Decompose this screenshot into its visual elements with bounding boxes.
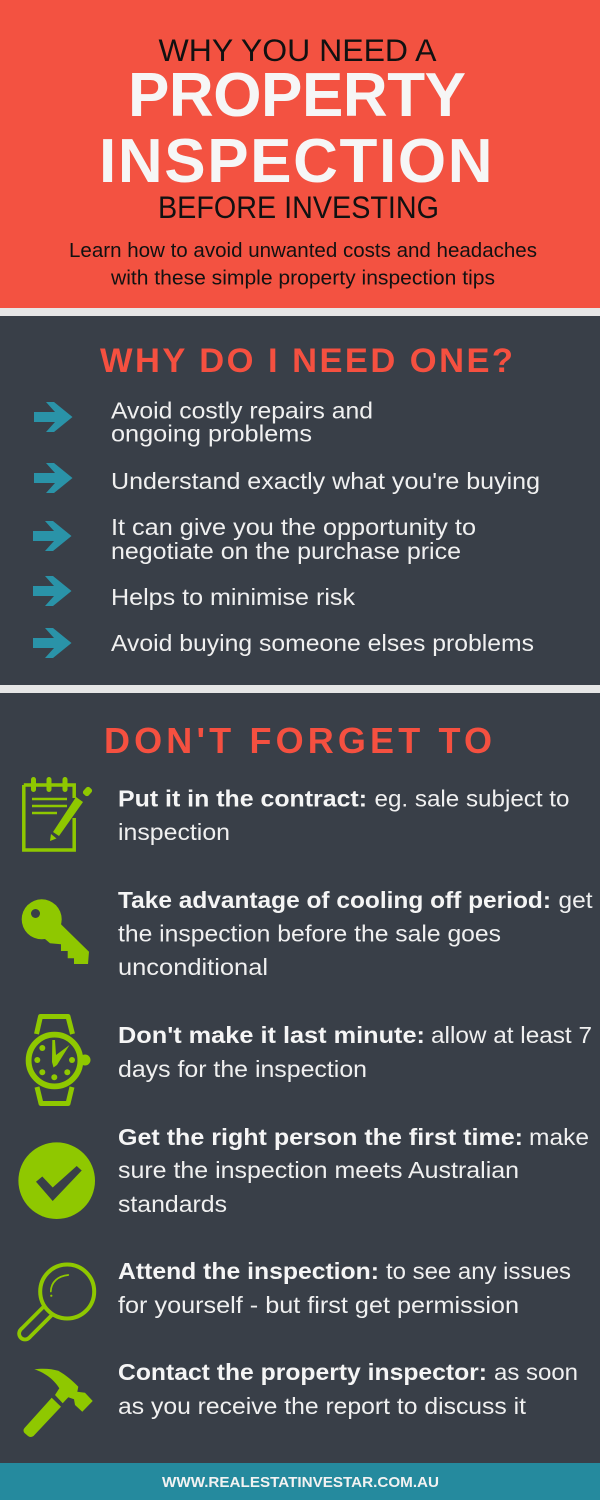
item: right person: sure the inspection meets Australian <box>118 1157 519 1183</box>
item: cooling off period: get <box>558 887 593 913</box>
subtitle: Learn how to avoid unwanted costs and headaches <box>69 240 537 262</box>
item: put it in the contract: eg. sale subject to <box>374 786 570 812</box>
item: cooling off period: unconditional <box>118 954 268 980</box>
panel: why do I need one <box>0 316 600 685</box>
item: contact the inspector: Contact the property inspector: <box>118 1359 487 1385</box>
list item: negotiate on price: It can give you the opportunity to <box>111 514 476 540</box>
list item: avoid costly repairs: Avoid costly repairs and <box>111 398 373 424</box>
item: attend the inspection: to see any issues <box>386 1258 571 1284</box>
header panel <box>0 0 600 308</box>
subtitle: with these simple property inspection tips <box>110 268 495 290</box>
list item: avoid costly repairs <box>34 398 373 446</box>
item: attend the inspection: Attend the inspection: <box>118 1258 379 1284</box>
list item: understand what you're buying: Understand exactly what you're buying <box>111 468 540 494</box>
item: cooling off period <box>118 887 593 980</box>
item: last minute <box>118 1022 592 1082</box>
item: contact the inspector: as soon <box>494 1359 578 1385</box>
list item: minimise risk: Helps to minimise risk <box>111 584 355 610</box>
icon: hammer <box>24 1369 93 1437</box>
item: right person <box>118 1124 589 1217</box>
item: last minute: allow at least 7 <box>431 1022 592 1048</box>
list item: understand what you're buying <box>34 463 540 494</box>
item: put it in the contract: Put it in the contract: <box>118 786 367 812</box>
list item: someone elses problems: Avoid buying someone elses problems <box>111 630 534 656</box>
title line: inspection: INSPECTION <box>99 127 492 196</box>
list item: someone elses problems <box>33 628 534 658</box>
item: right person: make <box>529 1124 589 1150</box>
item: put it in the contract: inspection <box>118 819 230 845</box>
item: attend the inspection <box>118 1258 571 1318</box>
item: right person: standards <box>118 1191 227 1217</box>
panel: don't forget to <box>0 693 600 1463</box>
item: attend the inspection: for yourself - but first get permission <box>118 1292 519 1318</box>
title line: property: PROPERTY <box>128 61 466 130</box>
icon: notebook and pencil <box>24 780 93 850</box>
item: right person: Get the right person the first time: <box>118 1124 523 1150</box>
item: cooling off period: Take advantage of cooling off period: <box>118 887 551 913</box>
item: cooling off period: the inspection before the sale goes <box>118 920 501 946</box>
list item: negotiate on price: negotiate on the purchase price <box>111 538 461 564</box>
icon: watch <box>29 1016 91 1104</box>
icon: check circle <box>18 1142 95 1219</box>
list item: avoid costly repairs: ongoing problems <box>111 420 312 446</box>
item: contact the inspector <box>118 1359 578 1419</box>
title line: before investing: BEFORE INVESTING <box>158 189 439 225</box>
title line: why you need a: WHY YOU NEED A <box>158 32 437 68</box>
item: put it in the contract <box>118 786 570 845</box>
footer bar <box>0 1463 600 1500</box>
subtitle <box>69 240 537 290</box>
list item: negotiate on price <box>33 514 476 564</box>
icon: magnifying glass <box>17 1264 94 1341</box>
item: last minute: Don't make it last minute: <box>118 1022 425 1048</box>
list item: minimise risk <box>33 576 355 610</box>
heading: why do I need one: WHY DO I NEED ONE? <box>100 342 513 380</box>
item: last minute: days for the inspection <box>118 1056 367 1082</box>
footer url: WWW.REALESTATINVESTAR.COM.AU <box>162 1474 439 1491</box>
heading: don't forget to: DON'T FORGET TO <box>104 720 492 761</box>
item: contact the inspector: as you receive the report to discuss it <box>118 1393 526 1419</box>
icon: key <box>22 899 89 964</box>
